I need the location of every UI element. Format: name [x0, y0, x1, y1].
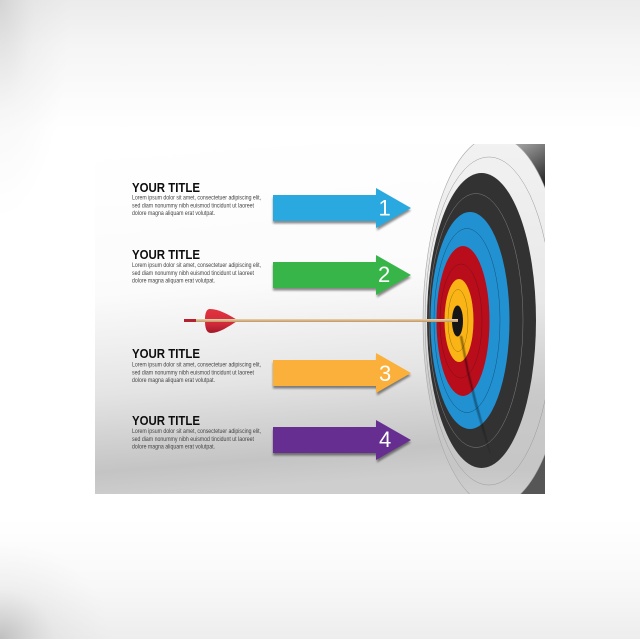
text 3: dolore magna aliquam erat volutpat. — [132, 377, 215, 384]
item 4 — [132, 413, 411, 462]
red ring — [436, 246, 490, 396]
target board — [422, 144, 545, 494]
black ring — [427, 173, 536, 468]
text 1: Lorem ipsum dolor sit amet, consectetuer adipiscing elit, — [132, 194, 261, 202]
text 4: dolore magna aliquam erat volutpat. — [132, 444, 215, 450]
bullseye — [452, 306, 463, 336]
arrow 3 — [273, 353, 411, 396]
arrow 1: 1 — [378, 196, 391, 220]
text 2: dolore magna aliquam erat volutpat. — [132, 278, 215, 284]
arrow 4: 4 — [379, 427, 391, 452]
title 4: YOUR TITLE — [132, 413, 200, 428]
arrow 4 — [273, 420, 411, 462]
text 1: dolore magna aliquam erat volutpat. — [132, 210, 215, 217]
item 3 — [132, 346, 411, 396]
text 4: sed diam nonummy nibh euismod tincidunt ut laoreet — [132, 436, 254, 443]
text 1 — [132, 194, 261, 217]
text 2: sed diam nonummy nibh euismod tincidunt ut laoreet — [132, 270, 254, 277]
fletching — [205, 309, 238, 333]
text 3 — [132, 362, 261, 384]
yellow ring — [444, 279, 474, 362]
title 2: YOUR TITLE — [132, 247, 200, 262]
arrow 2 — [273, 255, 411, 298]
board corner bottom — [521, 455, 545, 494]
arrow 3: 3 — [379, 361, 391, 386]
text 2: Lorem ipsum dolor sit amet, consectetuer adipiscing elit, — [132, 262, 261, 269]
blue ring — [430, 212, 510, 429]
text 2 — [132, 262, 261, 284]
item 1 — [132, 180, 411, 230]
title 3: YOUR TITLE — [132, 346, 200, 361]
outer white ring — [422, 144, 545, 494]
title 1: YOUR TITLE — [132, 180, 200, 195]
panel — [95, 144, 545, 494]
shaft — [196, 319, 458, 322]
arrow 1 — [273, 188, 411, 230]
text 1: sed diam nonummy nibh euismod tincidunt ut laoreet — [132, 202, 254, 209]
text 4: Lorem ipsum dolor sit amet, consectetuer adipiscing elit, — [132, 428, 261, 435]
item 2 — [132, 247, 411, 298]
arrow 2: 2 — [378, 262, 390, 287]
text 3: Lorem ipsum dolor sit amet, consectetuer adipiscing elit, — [132, 362, 261, 368]
text 3: sed diam nonummy nibh euismod tincidunt ut laoreet — [132, 369, 254, 376]
text 4 — [132, 428, 261, 450]
board corner top — [516, 144, 545, 187]
nock — [184, 319, 198, 322]
crease — [459, 335, 488, 444]
archery arrow — [184, 309, 458, 333]
